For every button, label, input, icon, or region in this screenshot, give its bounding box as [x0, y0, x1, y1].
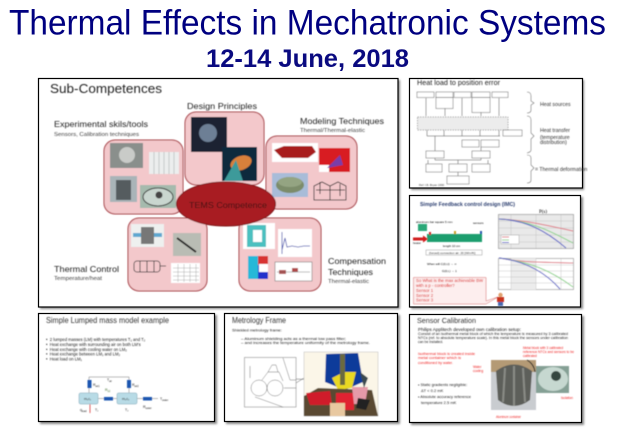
red annotations: Isothermal block is created inside	[418, 352, 475, 356]
group: experimental skills: Experimental skils/tools	[54, 119, 148, 129]
photo: container	[491, 360, 536, 410]
panel: sensor calibration	[410, 314, 584, 425]
brace labels: = Thermal deformation	[535, 167, 587, 173]
lumped circuit diagram: water	[162, 399, 168, 402]
description	[418, 327, 568, 344]
brace labels: (temperature	[540, 135, 570, 141]
center ellipse: TEMS competence	[176, 182, 276, 226]
panel: heat load to position error	[410, 78, 587, 190]
red annotations	[418, 346, 574, 419]
lumped circuit diagram: air2	[135, 385, 139, 388]
specs: • Absolute accuracy reference	[418, 394, 472, 399]
bode chart: phase	[498, 258, 574, 290]
bode chart: magnitude	[498, 210, 574, 248]
heading: Simple Feedback control design (IMC)	[420, 202, 515, 208]
heading: Simple Lumped mass model example	[46, 316, 169, 325]
bullet list: • 2 lumped masses (LM) with temperatures T₁ and T₂	[46, 337, 146, 342]
lumped circuit diagram: T₂	[125, 408, 129, 412]
group: thermal control: Temperature/heat	[54, 276, 103, 282]
lumped circuit diagram: R	[93, 383, 96, 387]
lumped circuit diagram: air1	[96, 385, 100, 388]
group: compensation techniques: Compensation	[328, 256, 386, 266]
panel: metrology frame	[224, 314, 400, 424]
heading: Sensor Calibration	[417, 316, 476, 325]
bullet list: • Heat exchange between LM₁ and LM₂	[46, 352, 120, 356]
description text: – and increases the temperature uniformity of the metrology frame.	[241, 340, 370, 345]
thermal bar schematic: aluminum bar square 5 mm	[416, 220, 453, 224]
thermal bar schematic: heater	[413, 241, 421, 245]
icon: person	[497, 293, 504, 306]
lumped circuit diagram: R	[132, 383, 135, 387]
description: Consist of an isothermal metal block of which the temperature is measured by 3 calibrated	[418, 332, 568, 336]
red annotations: Water	[473, 365, 482, 369]
red annotations: Aluminum container	[496, 415, 522, 419]
group: modeling techniques: Thermal/Thermal-elastic	[300, 128, 365, 134]
red annotations: metal container which is	[418, 356, 462, 360]
description text: – Aluminum shielding acts as a thermal low pass filter;	[241, 336, 346, 341]
group: modeling techniques: Modeling Techniques	[300, 116, 384, 126]
thermal bar schematic: G(0,t,) → 1	[442, 269, 457, 273]
lumped circuit diagram: load	[82, 410, 87, 413]
lumped circuit diagram: R	[143, 405, 146, 409]
specs: temperature 2.5 mK	[421, 400, 457, 405]
group: modeling techniques	[266, 116, 384, 209]
group: compensation techniques	[239, 218, 386, 291]
callout: question: Sensor 1	[416, 288, 434, 293]
bode chart: magnitude: P(s)	[539, 210, 547, 215]
group: thermal control: Thermal Control	[54, 264, 119, 274]
thermal bar schematic: (forced) convection air: 20 [W/m²K]	[429, 251, 476, 255]
description: NTCs (ref. to absolute temperature scale). In this metal block the sensors under calibration	[418, 336, 568, 340]
red annotations: Isolation	[561, 396, 573, 400]
brace labels: Heat transfer	[540, 128, 570, 134]
panel: simple lumped mass model	[38, 314, 217, 424]
line drawing	[244, 358, 322, 407]
bullet list: • Heat exchange with cooling water on LM₂	[46, 347, 127, 352]
lumped circuit diagram: q	[80, 408, 82, 412]
callout: question: Sensor 2	[416, 293, 434, 298]
lumped circuit diagram: T₁	[95, 408, 99, 412]
lumped circuit diagram: m₂c₂	[122, 397, 130, 401]
red annotations: conditioned by water.	[418, 361, 453, 365]
specs: ΔT < 0.2 mK	[421, 388, 444, 393]
center ellipse: TEMS competence: TEMS Competence	[189, 200, 267, 210]
callout: question	[414, 278, 498, 304]
heading: sub-competences: Sub-Competences	[50, 81, 163, 96]
brace labels	[527, 92, 587, 183]
lumped circuit diagram: R	[105, 388, 108, 392]
bullet list	[46, 337, 146, 362]
thermal bar schematic: When will C(0,t,l) → ∞	[427, 262, 456, 266]
panel: sub-competences	[38, 78, 400, 309]
heading: Heat load to position error	[417, 78, 500, 87]
group: thermal control	[54, 218, 207, 291]
photo: metal block	[536, 366, 569, 393]
group: design principles: Design Principles	[187, 101, 257, 111]
red annotations: cooling	[473, 369, 483, 373]
heading: Metrology Frame	[232, 316, 286, 325]
thermal bar schematic	[413, 220, 484, 273]
bullet list: • Heat exchange with surrounding air on both LM's	[46, 342, 141, 347]
flow diagram	[417, 92, 522, 184]
reference: Ref: I.B. Bryan 1990	[419, 183, 445, 187]
thermal bar schematic: length 10 cm	[443, 244, 461, 248]
lumped circuit diagram	[79, 377, 168, 413]
group: experimental skills	[54, 119, 183, 214]
CAD model	[304, 352, 378, 416]
group: compensation techniques: Techniques	[328, 267, 373, 277]
callout: question: Sensor 3	[416, 298, 434, 302]
lumped circuit diagram: 12	[108, 390, 111, 393]
panel: simple feedback control design	[410, 196, 583, 309]
group: experimental skills: Sensors, Calibration techniques	[54, 132, 139, 138]
description: can be installed.	[418, 340, 443, 344]
lumped circuit diagram: T	[160, 397, 162, 401]
group: design principles	[185, 101, 264, 185]
specs: • Static gradients negligible:	[418, 382, 467, 387]
red annotations: calibrated	[523, 354, 537, 358]
red annotations: Metal block with 3 calibrated	[523, 346, 563, 350]
description: Philips Applitech developed own calibration setup:	[418, 327, 521, 332]
subtitle: date: 12-14 June, 2018	[206, 45, 409, 73]
brace labels: distribution)	[540, 140, 567, 146]
description text: Shielded metrology frame:	[232, 328, 282, 332]
description text	[232, 328, 370, 345]
lumped circuit diagram: air	[109, 380, 112, 383]
lumped circuit diagram: m₁c₁	[84, 397, 92, 401]
title: Thermal Effects in Mechatronic Systems	[9, 4, 606, 42]
callout: question: with a p - controller?	[416, 283, 455, 288]
bullet list: • Heat load on LM₁	[46, 356, 83, 362]
callout: question: So What is the max achievable BW	[416, 278, 484, 283]
thermal bar schematic: sensors	[473, 221, 484, 225]
group: compensation techniques: Thermal-elastic	[328, 279, 369, 285]
lumped circuit diagram: water	[146, 407, 152, 410]
lumped circuit diagram: T	[107, 378, 109, 382]
red annotations: reference NTCs and sensors to be	[523, 350, 574, 354]
brace labels: Heat sources	[540, 102, 571, 108]
specs	[418, 382, 472, 405]
